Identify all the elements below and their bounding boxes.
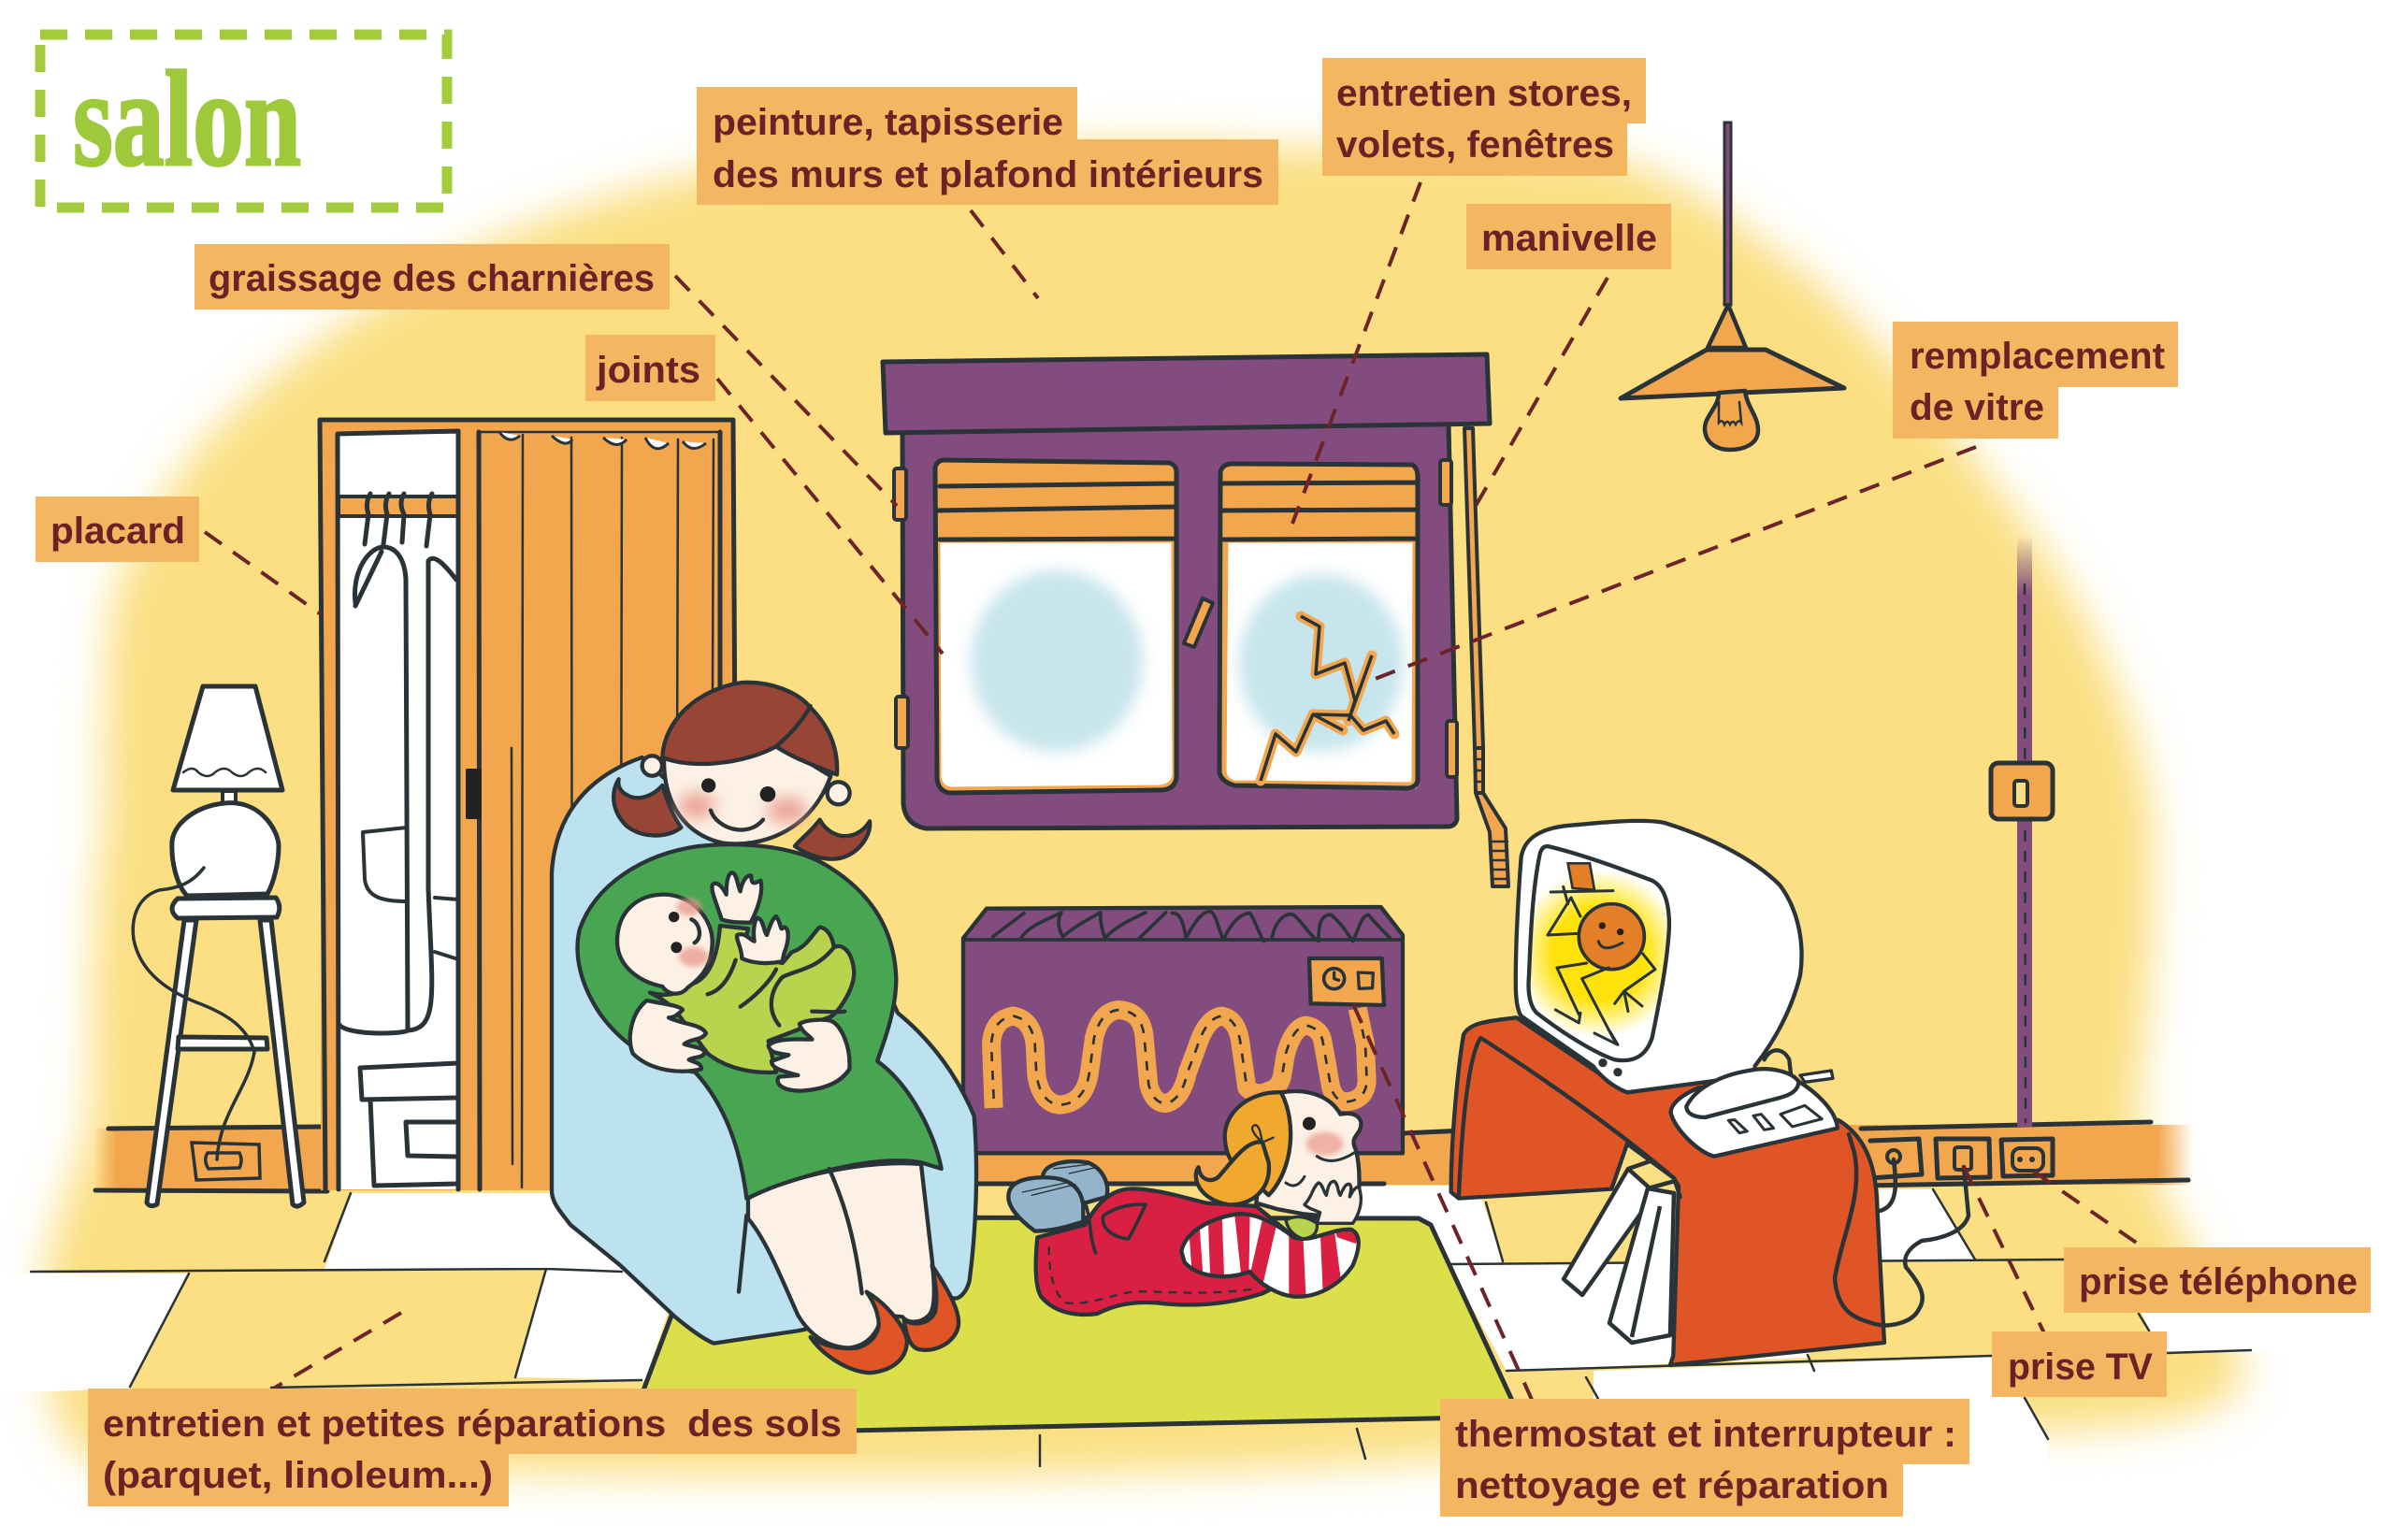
TV screen [1529, 846, 1669, 1060]
label: manivelle [1466, 204, 1671, 269]
label: placard: placard [50, 511, 185, 552]
label: peinture [697, 87, 1278, 205]
leader: TV socket [1964, 1167, 2045, 1335]
right pane [1219, 464, 1418, 788]
label: graissage [195, 244, 670, 309]
armchair [552, 757, 976, 1344]
mother's hands [630, 1000, 706, 1072]
label: joints [585, 335, 715, 401]
hangers and clothes [339, 494, 458, 1033]
shoes [904, 1265, 959, 1350]
leader: crank [1476, 278, 1608, 506]
leader: phone socket [2034, 1172, 2144, 1248]
leader: glass [1365, 447, 1976, 683]
label: remplacement de vitre: de vitre [1910, 387, 2044, 428]
child lying on the rug [1008, 1091, 1361, 1315]
label: entretien des sols: entretien et petites réparations des sols [103, 1403, 842, 1445]
TV stand and books [1451, 1017, 1969, 1365]
label: peinture: peinture, tapisserie [713, 102, 1063, 143]
books [1564, 1159, 1679, 1343]
cable [1835, 1134, 1969, 1325]
left pane [935, 460, 1176, 793]
label: manivelle: manivelle [1481, 218, 1657, 259]
leader: thermostat [1353, 1004, 1533, 1402]
label: entretien des sols: (parquet, linoleum...) [103, 1455, 493, 1496]
label: entretien stores [1322, 58, 1646, 176]
hinges [894, 460, 1457, 777]
label: peinture: des murs et plafond intérieurs [713, 154, 1263, 195]
handle [1184, 598, 1213, 647]
baseboard right [963, 1122, 2193, 1186]
radiator [963, 907, 1403, 1153]
title: salon [40, 35, 447, 208]
rug [627, 1217, 1520, 1435]
heating coil [991, 1008, 1367, 1108]
wall cable and switch [1991, 536, 2053, 1127]
cupboard [320, 420, 735, 1190]
standing lamp on stool [133, 686, 304, 1206]
blind box [883, 354, 1490, 433]
baby [617, 872, 854, 1072]
leader: seals [717, 379, 943, 654]
head [1256, 1091, 1361, 1218]
label: entretien stores: entretien stores, [1336, 73, 1632, 114]
phone [1671, 1069, 1838, 1157]
armchair and mother holding baby [552, 683, 976, 1373]
label: prise TV: prise TV [2008, 1346, 2153, 1388]
leader: blinds [1292, 182, 1421, 524]
striped sleeve [1181, 1213, 1359, 1300]
hair curls [613, 779, 681, 836]
label: prise téléphone [2064, 1247, 2371, 1313]
window crack [1261, 616, 1394, 781]
label: remplacement de vitre [1893, 322, 2178, 439]
label: entretien stores: volets, fenêtres [1336, 124, 1614, 166]
head [642, 683, 850, 843]
label: prise téléphone: prise téléphone [2079, 1261, 2358, 1303]
wall sockets [1870, 1139, 2053, 1178]
title: salon: salon [73, 43, 301, 194]
floor tiles [0, 1186, 2394, 1540]
label: joints: joints [596, 350, 700, 391]
blind crank [1464, 428, 1508, 886]
label: thermostat: nettoyage et réparation [1455, 1465, 1889, 1506]
label: remplacement de vitre: remplacement [1910, 336, 2165, 377]
label: entretien des sols [88, 1389, 857, 1506]
legs [748, 1163, 934, 1348]
window [883, 354, 1508, 886]
leader: cupboard [205, 532, 321, 614]
boxes [360, 1063, 458, 1186]
label: thermostat: thermostat et interrupteur : [1455, 1414, 1956, 1455]
dress [578, 844, 942, 1199]
television and phone [1516, 821, 1838, 1157]
thermostat box [1309, 958, 1384, 1005]
leader: painting [971, 210, 1038, 298]
label: placard [36, 497, 199, 562]
leader: floors [275, 1313, 401, 1388]
background: yellow room glow [45, 145, 2244, 1475]
label: thermostat [1440, 1399, 1969, 1517]
baseboard left [94, 1127, 327, 1191]
stand [1451, 1017, 1884, 1365]
label: prise TV [1992, 1331, 2167, 1397]
label: graissage: graissage des charnières [209, 258, 655, 299]
leader: hinges [675, 276, 897, 506]
ceiling lamp [1621, 122, 1844, 450]
